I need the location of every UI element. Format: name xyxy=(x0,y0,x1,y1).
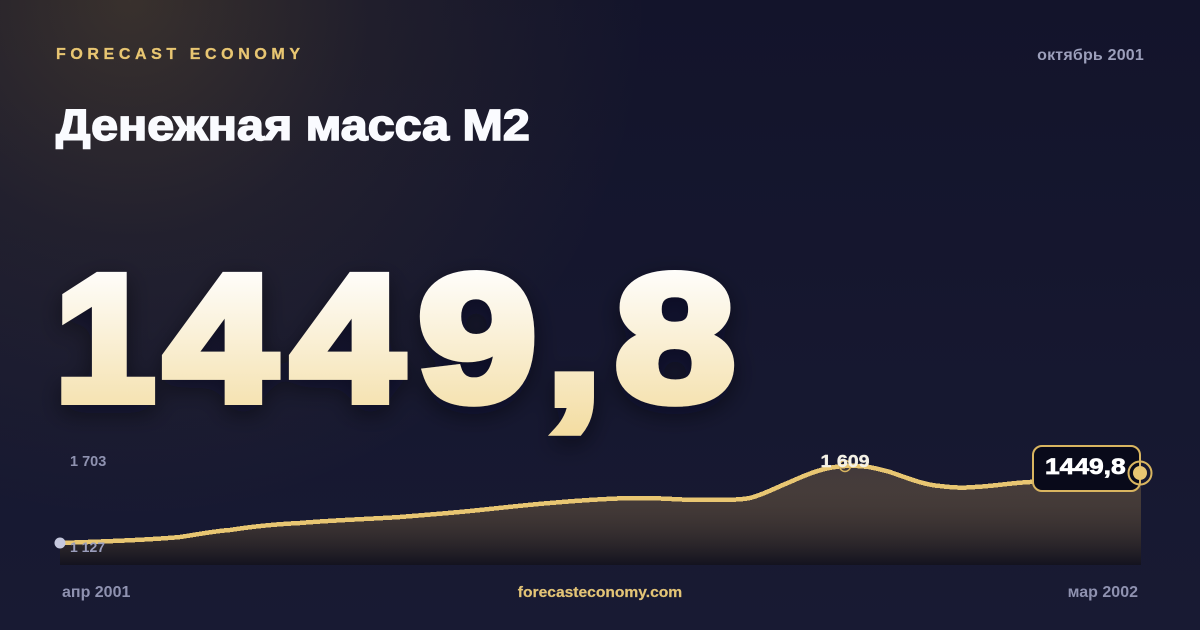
date label: октябрь 2001 xyxy=(1037,47,1144,64)
big number value: 9 xyxy=(418,238,536,438)
current value callout xyxy=(1033,446,1140,491)
peak marker xyxy=(840,460,850,472)
axis min label: 1 127 xyxy=(70,539,105,555)
chart line xyxy=(60,466,1141,543)
peak label: 1 609 xyxy=(820,451,870,471)
axis start date: апр 2001 xyxy=(62,584,130,601)
big number value: 1 xyxy=(55,239,155,439)
end point marker xyxy=(1128,462,1152,484)
area chart xyxy=(60,466,1141,565)
axis max label: 1 703 xyxy=(70,454,106,470)
current value callout: 1449,8 xyxy=(1045,455,1126,479)
axis end date: мар 2002 xyxy=(1068,584,1138,601)
big number value: 4 xyxy=(164,239,276,439)
big number value xyxy=(55,238,735,442)
big number value: 8 xyxy=(615,238,735,438)
source url: forecasteconomy.com xyxy=(518,584,682,601)
title: Денежная масса М2 xyxy=(56,100,530,150)
big number value: , xyxy=(546,242,602,442)
chart area fill xyxy=(60,466,1141,565)
start point marker xyxy=(54,538,66,548)
big number value: 4 xyxy=(292,239,403,439)
brand label: FORECAST ECONOMY xyxy=(56,46,300,63)
